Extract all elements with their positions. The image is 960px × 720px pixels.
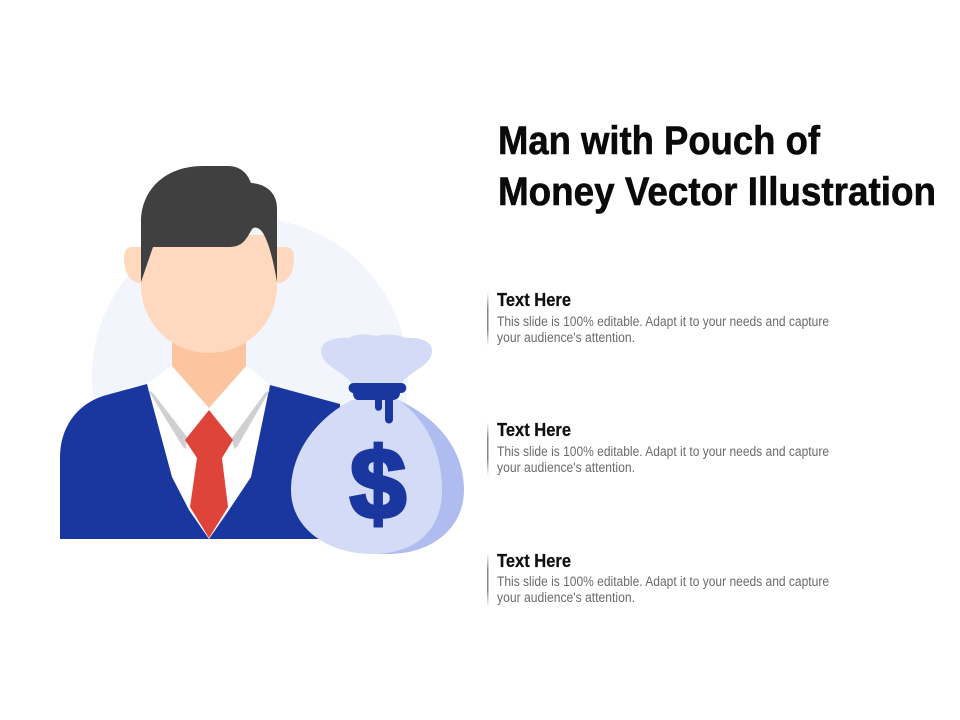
title: Money Vector Illustration <box>498 170 936 214</box>
text block 3 <box>487 551 829 607</box>
illustration: man <box>60 166 340 539</box>
man: collar shadows <box>148 390 270 449</box>
man: shirt <box>147 365 270 539</box>
bag: back shade <box>370 400 464 554</box>
text block 3: This slide is 100% editable. Adapt it to your needs and capture <box>497 574 829 589</box>
text block 2 <box>487 420 829 476</box>
text block 2: your audience's attention. <box>497 460 635 475</box>
title <box>498 119 936 214</box>
title: Man with Pouch of <box>498 119 821 163</box>
block 1 divider <box>487 292 488 346</box>
text block 2: This slide is 100% editable. Adapt it to your needs and capture <box>497 444 829 459</box>
background circle <box>92 218 408 534</box>
bag: dollar sign: $ <box>350 428 406 540</box>
block 2 divider <box>487 422 488 476</box>
text block 1: your audience's attention. <box>497 330 635 345</box>
text block 1: This slide is 100% editable. Adapt it to your needs and capture <box>497 314 829 329</box>
bag: body <box>291 400 442 554</box>
icon: money bag <box>291 334 464 554</box>
text block 1 <box>487 290 829 346</box>
text block 1: Text Here <box>497 290 571 310</box>
man: neck <box>172 340 246 408</box>
man: jacket <box>60 384 340 539</box>
bag: top ruffle <box>321 334 432 384</box>
text block 2: Text Here <box>497 420 571 440</box>
text block 3: your audience's attention. <box>497 590 635 605</box>
block 3 divider <box>487 553 488 607</box>
text block 3: Text Here <box>497 551 571 571</box>
bag: tie knot <box>349 383 406 424</box>
man: face <box>141 235 277 353</box>
man: hair <box>141 166 277 282</box>
man: ears <box>124 247 294 283</box>
man: tie <box>185 410 233 538</box>
